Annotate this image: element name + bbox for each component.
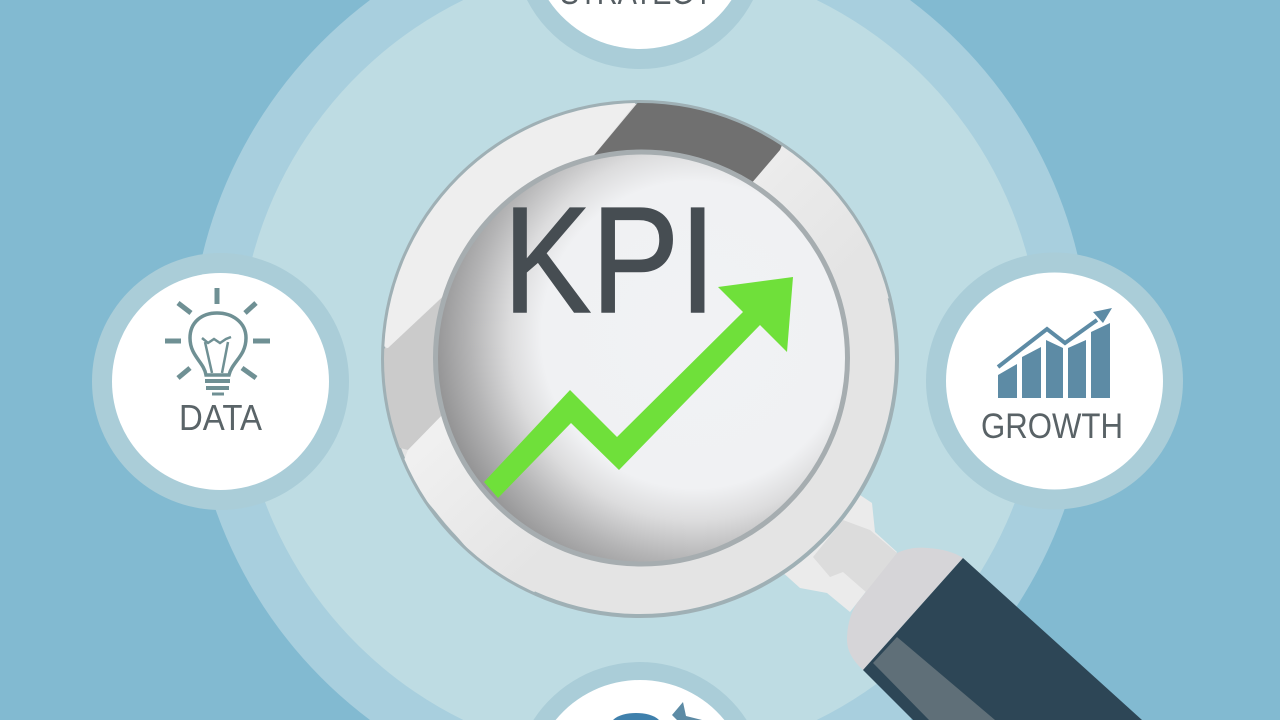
handle grip	[863, 558, 1142, 720]
node: strategy	[527, 0, 753, 69]
handle collar	[780, 495, 897, 612]
handle cap	[847, 548, 963, 670]
node: growth	[926, 252, 1183, 510]
node: bottom	[533, 662, 747, 720]
handle highlight	[873, 637, 995, 720]
label: data: DATA	[179, 397, 262, 438]
lens glass	[436, 152, 848, 564]
title: KPI: KPI	[503, 175, 716, 344]
node: data	[92, 253, 349, 510]
outer ring	[190, 0, 1090, 720]
label: growth: GROWTH	[981, 407, 1123, 446]
icon: light bulb	[165, 288, 270, 394]
icon: circular arrow	[613, 702, 702, 720]
icon: growth chart	[998, 308, 1112, 398]
magnifier handle	[780, 495, 1142, 720]
lens ring	[383, 102, 897, 616]
handle neck	[813, 520, 897, 593]
magnifier	[370, 100, 900, 616]
ring reflections	[370, 100, 900, 610]
inner disc	[239, 0, 1041, 720]
arrow: rising trend	[484, 277, 793, 498]
